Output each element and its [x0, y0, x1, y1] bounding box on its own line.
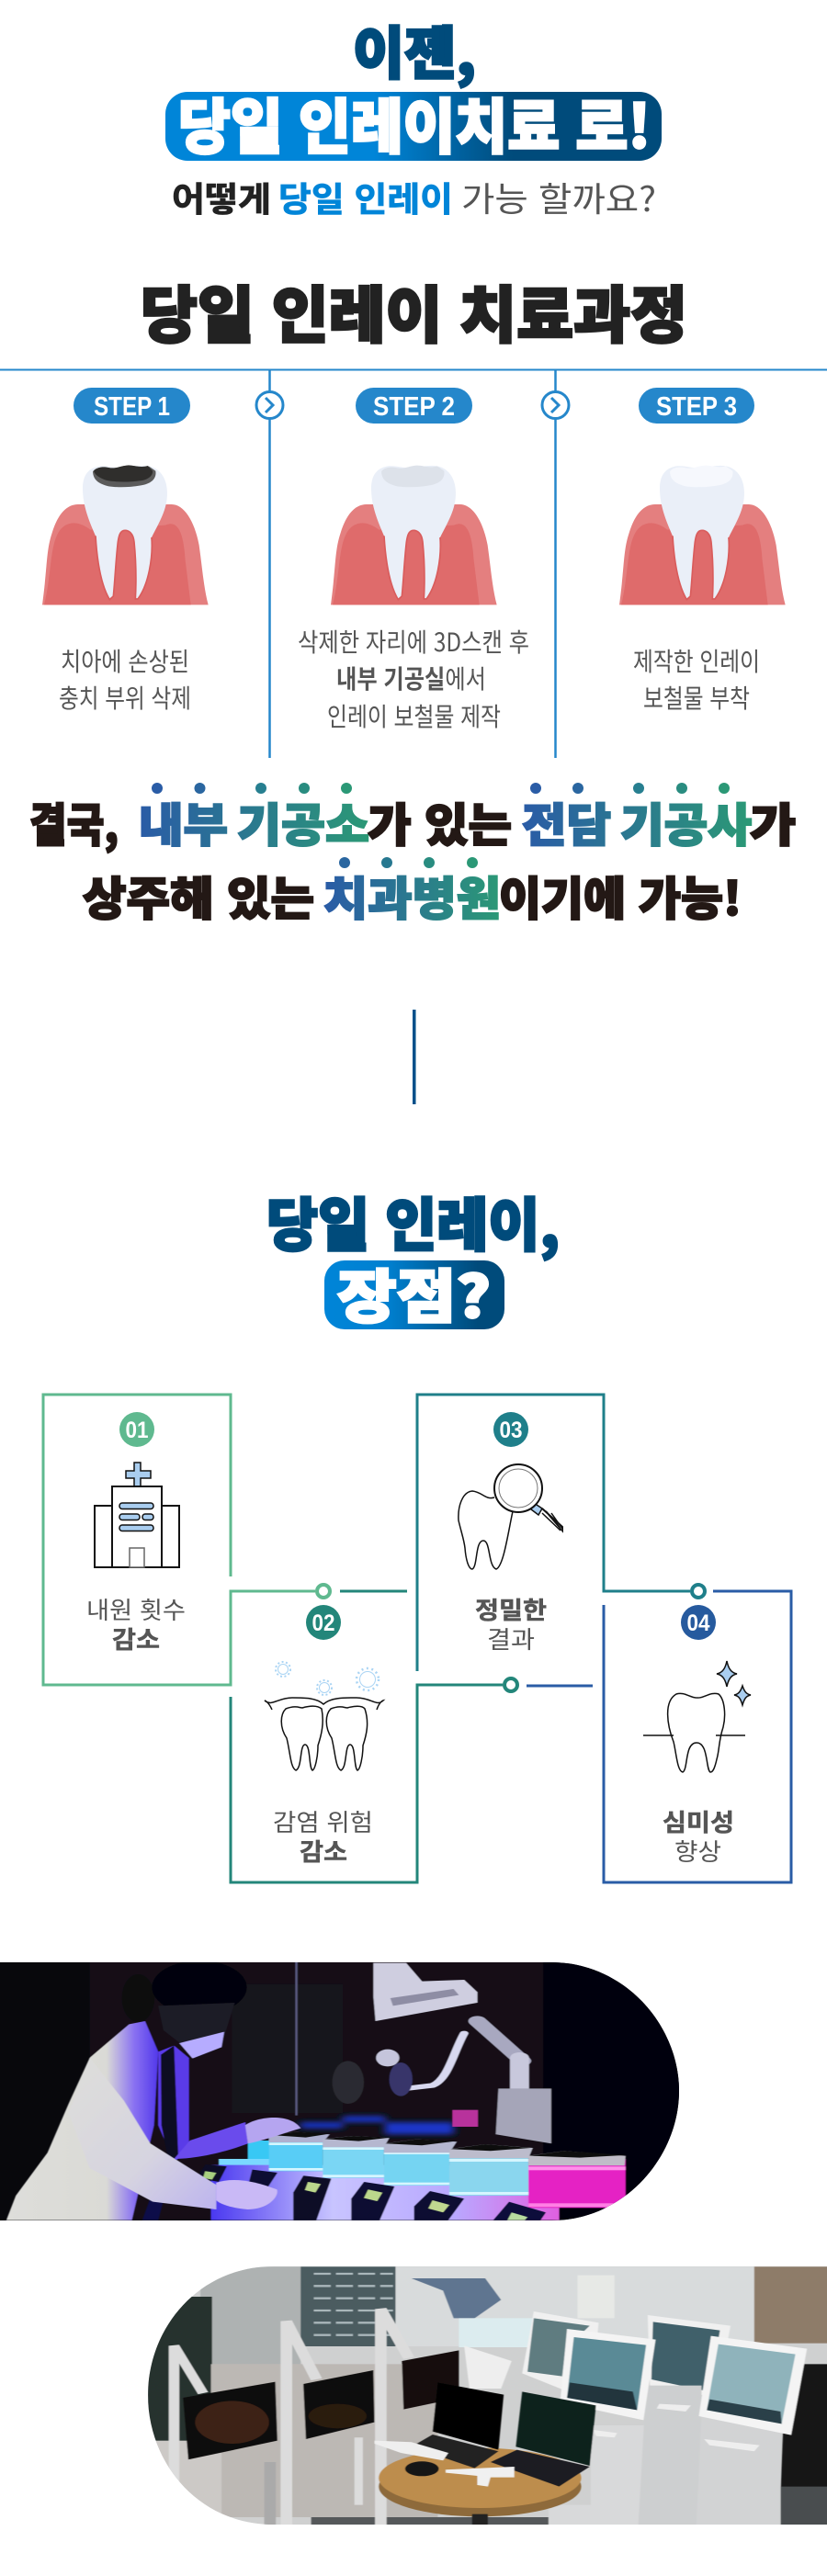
icon: tooth with magnifier — [459, 1464, 562, 1569]
benefit 02 label: 감소 — [300, 1834, 347, 1868]
benefit 02 label: 감염 위험 — [273, 1804, 373, 1838]
statement line 1 — [29, 789, 796, 855]
benefit 04 label: 향상 — [674, 1834, 721, 1868]
number 01: 01 — [125, 1418, 149, 1443]
step 2 badge: STEP 2 — [373, 392, 455, 422]
statement line 1: 가 — [750, 789, 796, 855]
step 3 badge: STEP 3 — [656, 392, 737, 422]
badge: same-day inlay treatment: 당일 인레이치료 로! — [178, 79, 651, 165]
statement line 1: 기공소 — [237, 789, 369, 855]
subtitle question: 가능 할까요? — [461, 172, 656, 221]
tooth prepared — [331, 466, 497, 604]
step 2 description: 내부 기공실에서 — [336, 660, 486, 696]
step 1 description: 치아에 손상된 — [61, 642, 189, 679]
benefit 04 — [643, 1605, 751, 1868]
statement line 2: 치과병원 — [323, 863, 501, 929]
benefit 01 label: 감소 — [112, 1621, 160, 1655]
tablets — [183, 2382, 278, 2459]
photo: technician with glowing curing units — [0, 1960, 685, 2220]
process dividers — [0, 369, 827, 758]
number 01 — [119, 1412, 154, 1447]
tooth with cavity — [42, 465, 209, 604]
emphasis dots — [152, 783, 730, 868]
step 2 description: 인레이 보철물 제작 — [327, 697, 501, 734]
scanners — [375, 2441, 448, 2460]
monitors — [522, 2311, 599, 2389]
benefit 02 — [265, 1605, 383, 1868]
arrow: step 1 to 2 — [256, 391, 283, 419]
statement line 1: 가 있는 — [368, 789, 512, 855]
germs — [276, 1662, 379, 1695]
heading: advantages: 당일 인레이, — [266, 1180, 560, 1263]
table — [379, 2482, 583, 2517]
subtitle question: 어떻게 — [172, 172, 271, 221]
benefit 03 label — [475, 1592, 547, 1655]
tooth restored — [619, 466, 786, 604]
badge: 장점?: 장점? — [337, 1251, 491, 1335]
statement line 1: 전담 — [522, 789, 611, 855]
section divider line — [413, 1010, 415, 1104]
statement line 1: 기공사 — [620, 789, 752, 855]
step 1 description — [59, 642, 191, 716]
statement line 1: 결국, — [29, 789, 119, 855]
photo: intraoral scanners and monitors — [147, 2266, 827, 2533]
subtitle question — [172, 172, 656, 221]
step 1 badge: STEP 1 — [94, 392, 170, 422]
step 2 description — [298, 623, 529, 734]
benefits flow connectors — [43, 1395, 791, 1882]
number 04: 04 — [687, 1610, 710, 1636]
benefit 01 label — [86, 1592, 186, 1655]
woman — [122, 1974, 154, 2022]
teeth outline — [265, 1698, 383, 1770]
step 1 column — [42, 388, 209, 716]
conclusion statement — [29, 783, 796, 929]
statement line 1: 내부 — [139, 789, 228, 855]
step 1 description: 충치 부위 삭제 — [59, 679, 191, 716]
statement line 2 — [83, 863, 742, 929]
statement line 2: 이기에 가능! — [499, 863, 742, 929]
icon: hospital — [95, 1463, 179, 1567]
benefit 04 label — [663, 1804, 734, 1868]
benefit 02 label — [273, 1804, 373, 1868]
benefit 03 label: 결과 — [487, 1621, 535, 1655]
step 2 badge — [356, 388, 472, 424]
heading: treatment process: 당일 인레이 치료과정 — [141, 266, 687, 356]
step 3 description — [633, 642, 760, 716]
number 04 — [681, 1605, 716, 1640]
step 2 description: 삭제한 자리에 3D스캔 후 — [298, 623, 529, 660]
number 02: 02 — [312, 1610, 334, 1636]
subtitle question: 당일 인레이 — [278, 172, 453, 221]
benefit 01 — [86, 1412, 186, 1655]
step 3 badge — [639, 388, 754, 424]
benefit 03 — [459, 1412, 562, 1655]
cubes — [246, 2141, 270, 2159]
step 1 badge — [74, 388, 190, 424]
benefit 04 label: 심미성 — [663, 1804, 734, 1838]
step 3 column — [619, 388, 786, 716]
laptops — [433, 2382, 504, 2450]
icon: teeth with germs — [265, 1662, 383, 1770]
icon: shining tooth — [643, 1661, 751, 1772]
statement line 2: 상주해 있는 — [83, 863, 314, 929]
screens — [197, 2164, 227, 2182]
heading: 이젠,: 이젠, — [353, 7, 476, 90]
arrow: step 2 to 3 — [542, 391, 569, 419]
step 3 description: 보철물 부착 — [643, 679, 750, 716]
step 3 description: 제작한 인레이 — [633, 642, 760, 679]
number 02 — [306, 1605, 341, 1640]
number 03 — [493, 1412, 528, 1447]
stands — [174, 2309, 409, 2533]
benefit 03 label: 정밀한 — [475, 1592, 547, 1626]
step 2 column — [298, 388, 529, 734]
number 03: 03 — [500, 1418, 522, 1443]
benefit 01 label: 내원 횟수 — [86, 1592, 186, 1626]
